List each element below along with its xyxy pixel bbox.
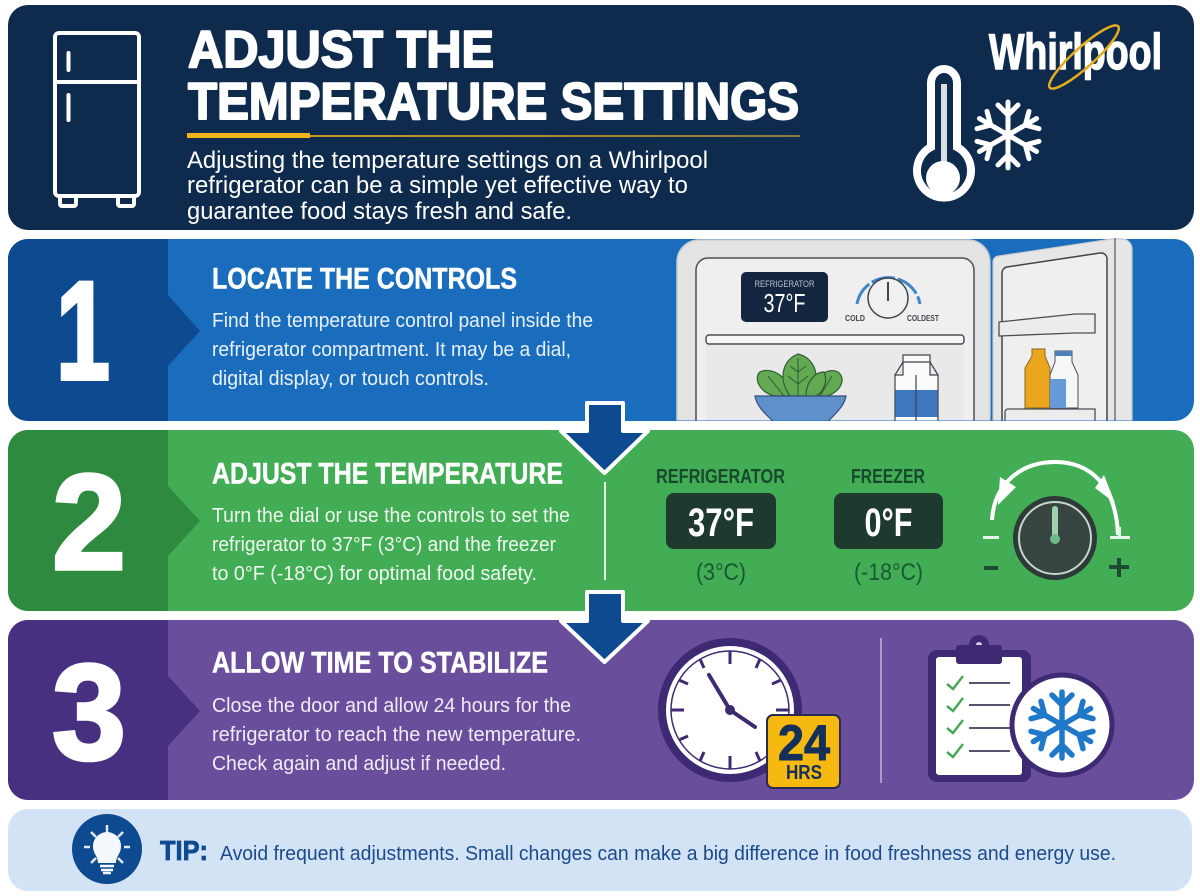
divider xyxy=(604,482,606,580)
title: TEMPERATURE SETTINGS xyxy=(188,73,799,131)
icon: checklist clipboard xyxy=(928,635,1031,782)
illustration: open refrigerator xyxy=(677,238,1132,430)
step 1 body: digital display, or touch controls. xyxy=(212,368,489,390)
control dial: COLDEST xyxy=(907,314,939,323)
step 3 body xyxy=(212,695,581,775)
title: ADJUST THE xyxy=(188,21,494,79)
icon: clock xyxy=(662,642,798,778)
logo: Whirlpool xyxy=(989,19,1162,95)
intro text: refrigerator can be a simple yet effective way to xyxy=(187,172,688,199)
panel: tip xyxy=(8,809,1192,891)
step 1 body: Find the temperature control panel inside the xyxy=(212,310,593,332)
icon: snowflake badge xyxy=(1012,675,1112,775)
temperature display: 37°F xyxy=(764,288,806,318)
step 3 body: Close the door and allow 24 hours for the xyxy=(212,695,571,717)
panel: step 3 xyxy=(8,620,1194,800)
title underline xyxy=(187,133,800,138)
step 2 heading: ADJUST THE TEMPERATURE xyxy=(212,458,563,490)
refrigerator door xyxy=(993,238,1132,430)
header panel xyxy=(8,5,1194,230)
step 1 body: refrigerator compartment. It may be a dial, xyxy=(212,339,571,361)
spinach bowl xyxy=(755,354,846,424)
freezer setting: 0°F xyxy=(864,501,912,545)
step 2 body: refrigerator to 37°F (3°C) and the freezer xyxy=(212,534,556,556)
badge: 24 hours: HRS xyxy=(786,762,822,784)
icon: temperature dial xyxy=(983,462,1130,580)
refrigerator setting: REFRIGERATOR xyxy=(656,466,785,488)
badge: 24 hours xyxy=(767,715,840,788)
icon: snowflake xyxy=(974,102,1042,168)
step number 3: 3 xyxy=(52,636,126,788)
step 1 heading: LOCATE THE CONTROLS xyxy=(212,262,517,296)
intro text: Adjusting the temperature settings on a Whirlpool xyxy=(187,147,708,174)
step number 2: 2 xyxy=(52,446,126,598)
step 3 body: refrigerator to reach the new temperature. xyxy=(212,724,581,746)
tip label: TIP: xyxy=(160,835,208,866)
badge: 24 hours: 24 xyxy=(778,715,830,771)
step 2 body: Turn the dial or use the controls to set the xyxy=(212,505,570,527)
temperature display: REFRIGERATOR xyxy=(754,279,815,289)
step 3 heading: ALLOW TIME TO STABILIZE xyxy=(212,646,548,680)
icon: thermometer xyxy=(917,69,971,198)
arrow: step 1 to step 2 xyxy=(561,403,648,473)
intro text xyxy=(187,147,708,225)
panel: step 2 xyxy=(8,430,1194,611)
temperature display xyxy=(741,272,828,322)
door shelf xyxy=(999,314,1095,336)
control dial: COLD xyxy=(845,314,865,323)
icon: light bulb xyxy=(72,814,142,884)
arrow: step 2 to step 3 xyxy=(561,592,648,662)
refrigerator setting xyxy=(656,466,785,586)
step 2 body xyxy=(212,505,570,585)
milk carton xyxy=(895,355,938,430)
tip text: Avoid frequent adjustments. Small changes can make a big difference in food freshness and energy use. xyxy=(220,843,1116,865)
divider xyxy=(880,638,882,783)
step 3 body: Check again and adjust if needed. xyxy=(212,753,506,775)
intro text: guarantee food stays fresh and safe. xyxy=(187,198,572,225)
refrigerator setting: (3°C) xyxy=(696,559,746,586)
step 2 body: to 0°F (-18°C) for optimal food safety. xyxy=(212,563,537,585)
bottles xyxy=(1025,349,1078,408)
freezer setting xyxy=(834,466,943,586)
icon: refrigerator outline xyxy=(55,33,139,206)
lower door shelf xyxy=(1004,408,1096,420)
fridge shelf xyxy=(705,334,965,345)
refrigerator setting: 37°F xyxy=(688,501,754,545)
step number 1: 1 xyxy=(56,252,110,409)
step 1 body xyxy=(212,310,593,390)
title xyxy=(188,21,799,131)
control dial xyxy=(845,278,939,323)
panel: step 1 xyxy=(8,238,1194,430)
freezer setting: (-18°C) xyxy=(854,559,923,586)
freezer setting: FREEZER xyxy=(851,466,925,488)
